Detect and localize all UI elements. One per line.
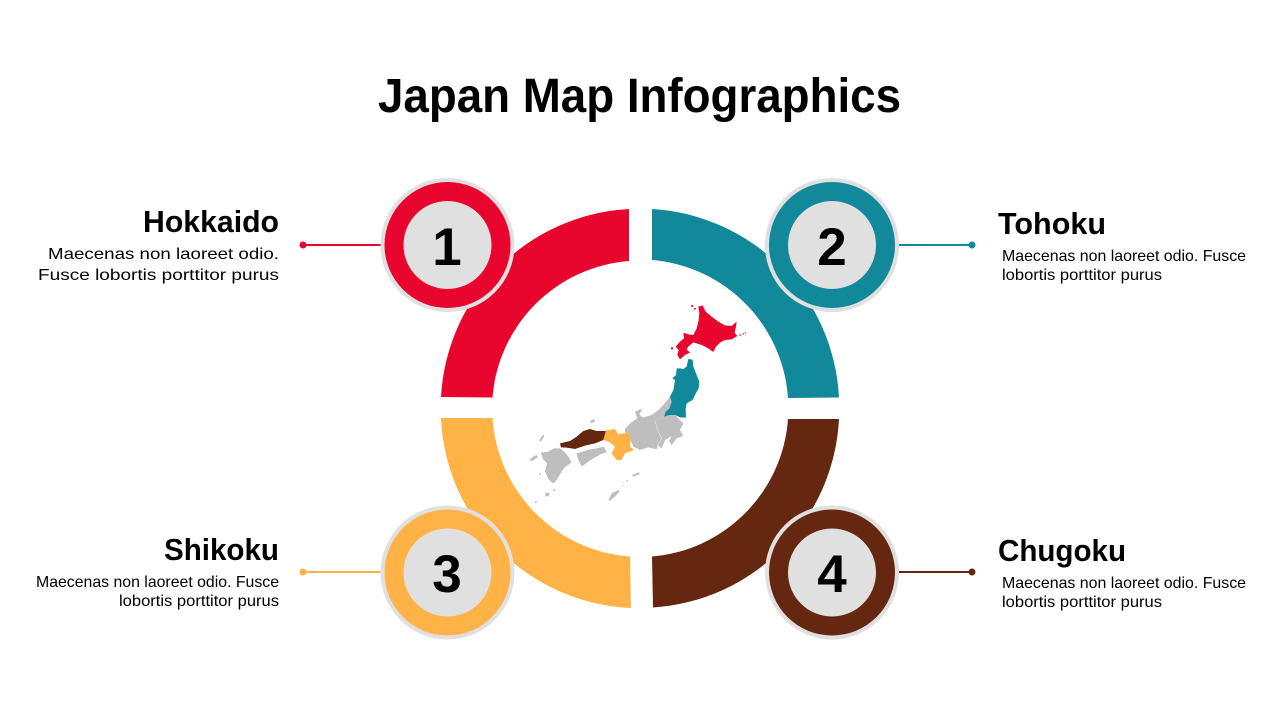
text block: Shikoku: Shikoku xyxy=(164,532,279,567)
text block: Tohoku: lobortis porttitor purus xyxy=(1002,267,1162,284)
number badge 2: 2 xyxy=(817,218,847,277)
text block: Chugoku: Chugoku xyxy=(998,533,1126,568)
text block: Hokkaido: Hokkaido xyxy=(143,204,279,239)
japan map xyxy=(529,305,746,503)
text block: Tohoku: Maecenas non laoreet odio. Fusce xyxy=(1002,248,1246,265)
text block: Chugoku xyxy=(998,533,1246,611)
ring segment: Chugoku xyxy=(652,419,839,608)
text block: Chugoku: lobortis porttitor purus xyxy=(1002,594,1162,611)
map region: central and eastern Honshu xyxy=(625,397,683,450)
text block: Shikoku: Maecenas non laoreet odio. Fusce xyxy=(36,574,279,591)
number badge 3: 3 xyxy=(432,545,462,604)
text block: Hokkaido: Maecenas non laoreet odio. xyxy=(48,246,279,263)
number badge 1 xyxy=(380,178,514,312)
number badge 1: 1 xyxy=(432,218,462,277)
text block: Shikoku xyxy=(36,532,279,610)
connector: Chugoku xyxy=(898,568,976,576)
number badge 4 xyxy=(765,506,899,640)
text block: Hokkaido: Fusce lobortis porttitor purus xyxy=(38,267,279,284)
ring segment: Tohoku xyxy=(652,209,839,398)
map region: Shikoku xyxy=(603,429,634,460)
connector: Hokkaido xyxy=(300,242,383,248)
title: Japan Map Infographics xyxy=(378,70,901,123)
map region: Kyushu, Shikoku island and outlying islands xyxy=(529,419,640,503)
map region: Chugoku xyxy=(560,429,607,449)
connector: Tohoku xyxy=(898,242,976,248)
connector: Shikoku xyxy=(300,568,383,576)
number badge 2 xyxy=(765,178,899,312)
text block: Hokkaido xyxy=(38,204,279,284)
map region: Hokkaido xyxy=(671,305,746,359)
text block: Shikoku: lobortis porttitor purus xyxy=(119,593,279,610)
text block: Tohoku: Tohoku xyxy=(998,206,1106,241)
text block: Tohoku xyxy=(998,206,1246,284)
ring segment: Shikoku xyxy=(441,418,631,608)
ring segment: Hokkaido xyxy=(441,209,629,398)
map region: Tohoku xyxy=(664,359,699,418)
number badge 4: 4 xyxy=(817,545,847,604)
text block: Chugoku: Maecenas non laoreet odio. Fusce xyxy=(1002,575,1246,592)
number badge 3 xyxy=(380,506,514,640)
